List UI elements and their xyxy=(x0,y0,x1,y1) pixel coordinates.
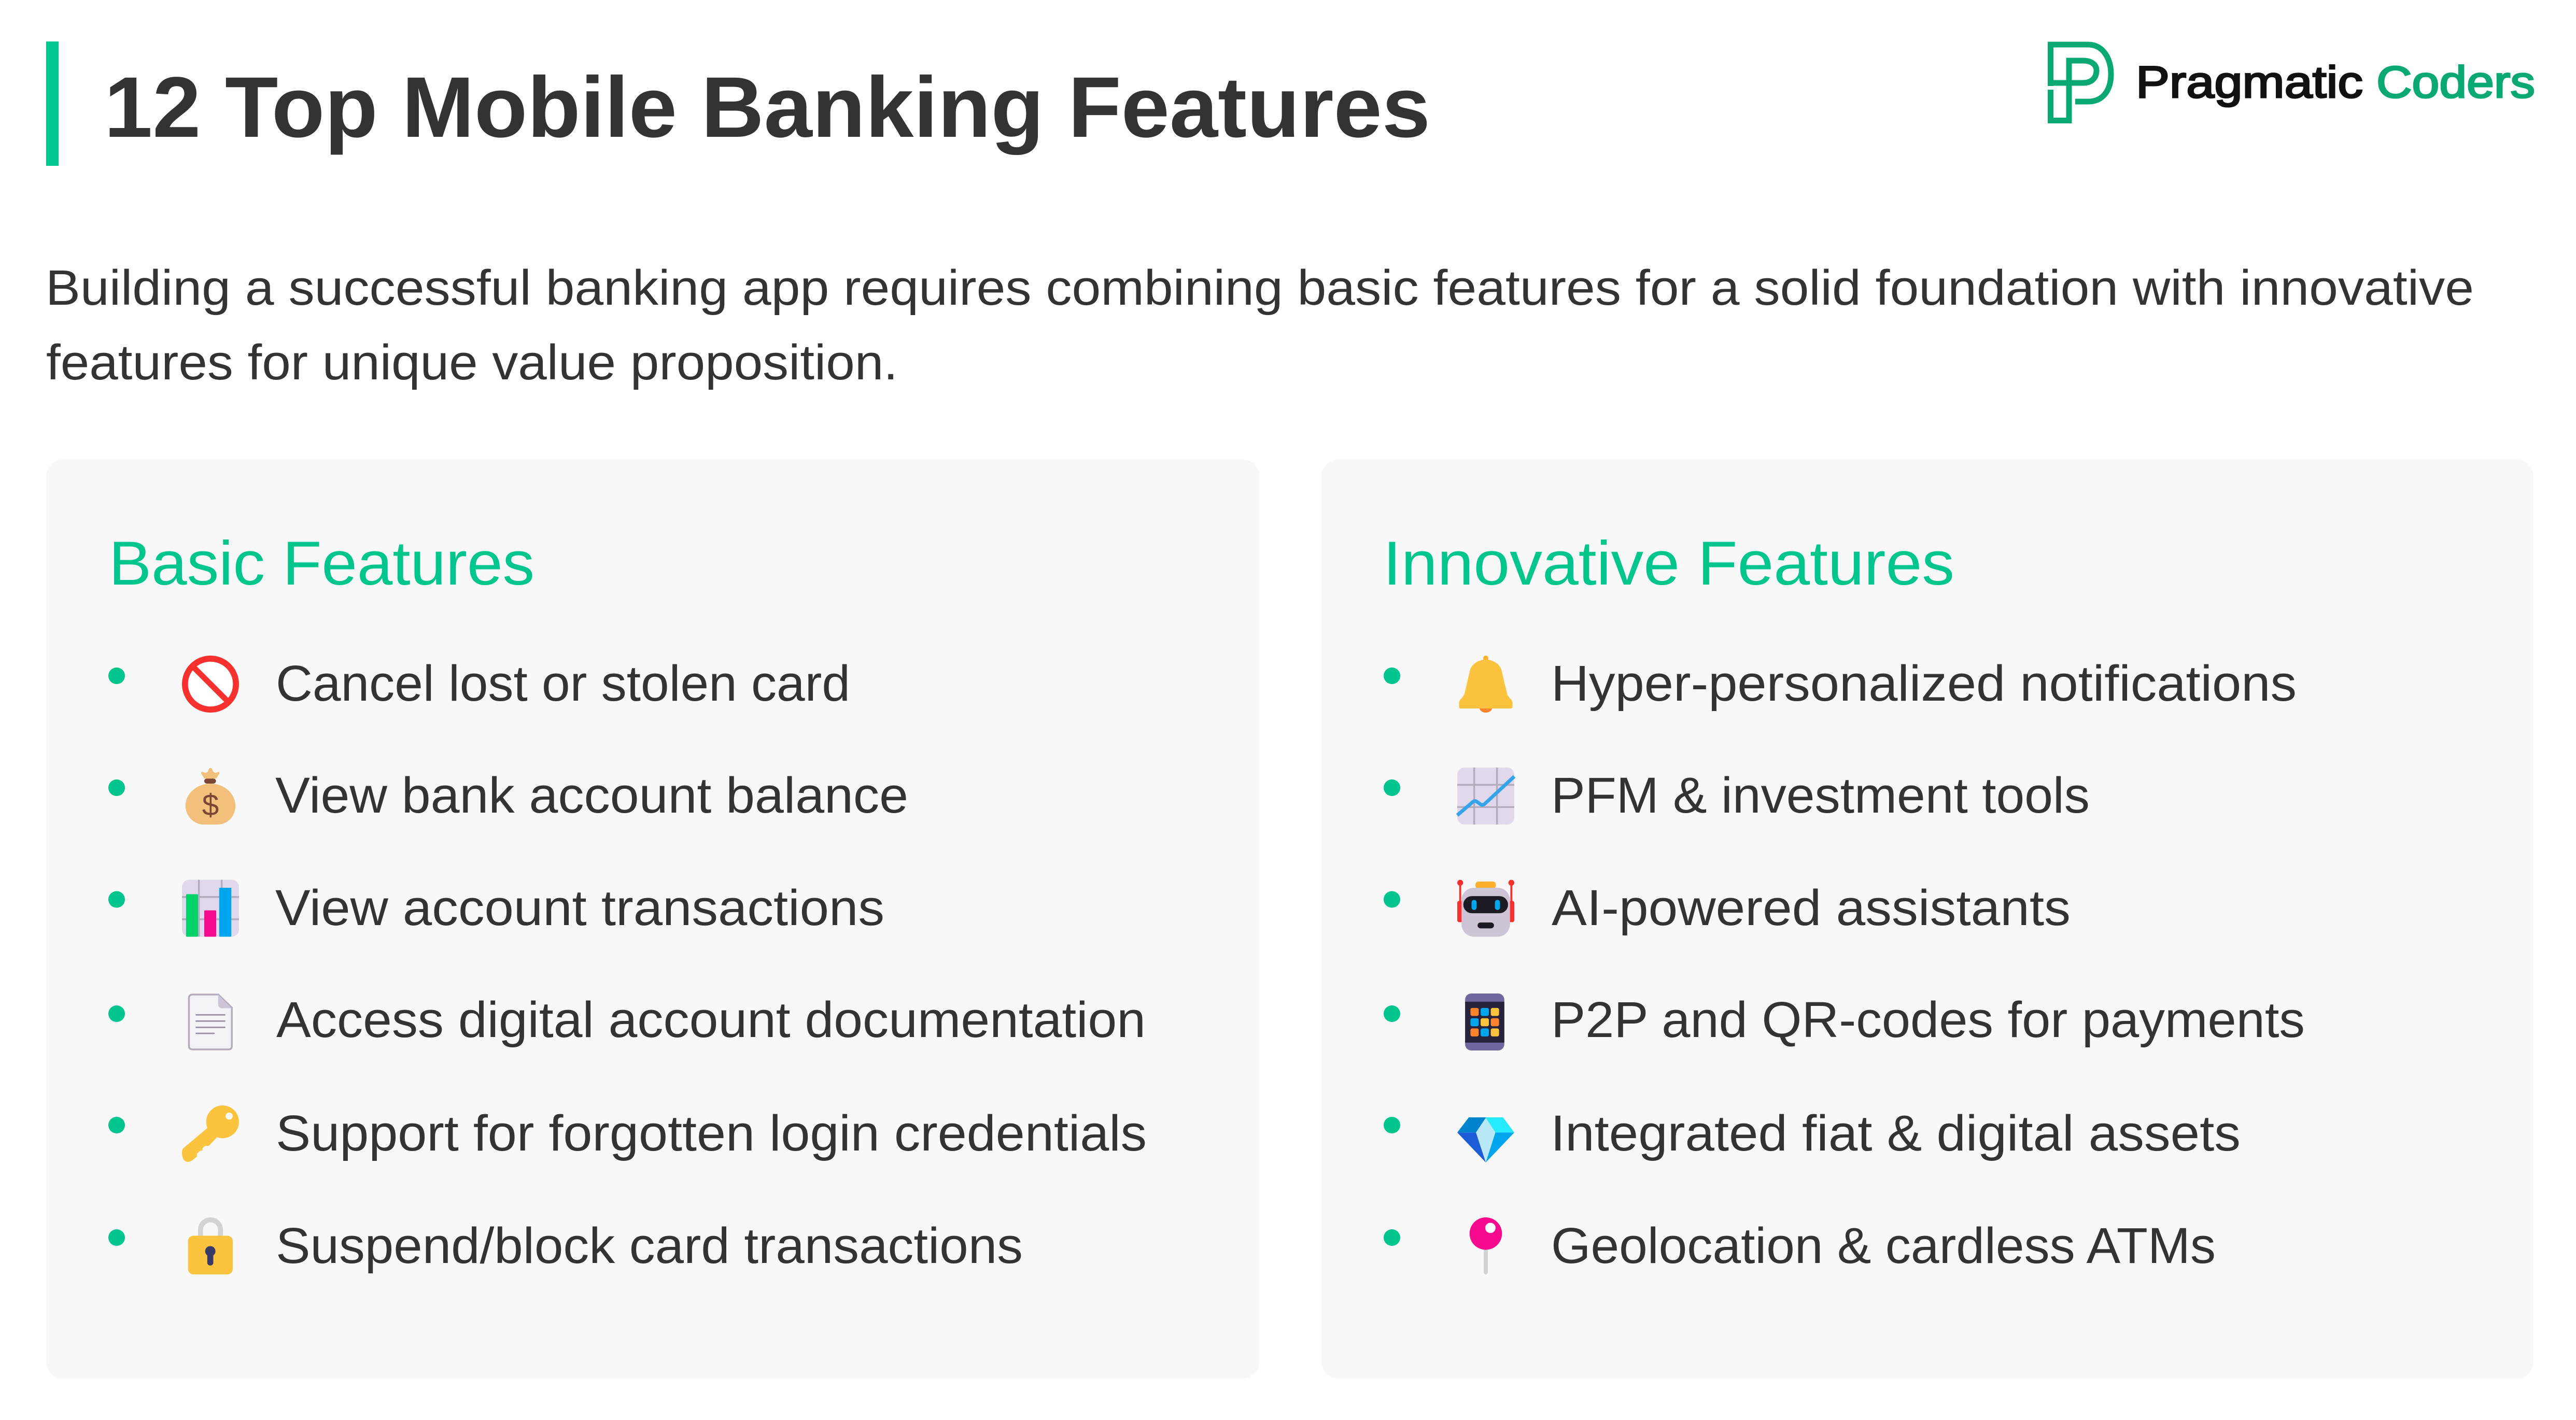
logo wordmark: Pragmatic xyxy=(2136,58,2363,107)
icon: no entry sign xyxy=(185,659,236,709)
icon: mobile phone xyxy=(1465,993,1504,1050)
panel: basic features xyxy=(46,460,1259,1379)
item: AI-powered assistants: AI-powered assistants xyxy=(1552,879,2071,936)
panel: innovative features xyxy=(1321,460,2533,1379)
heading: basic features: Basic Features xyxy=(109,529,534,598)
item: hyper-personalized notifications: Hyper-personalized notifications xyxy=(1551,655,2297,712)
item: cancel lost or stolen card: Cancel lost or stolen card xyxy=(276,655,850,712)
icon: money bag: $ xyxy=(202,788,219,822)
icon: money bag xyxy=(186,768,235,825)
icon: document xyxy=(189,995,232,1049)
icon: robot xyxy=(1457,880,1514,937)
item: integrated fiat and digital assets: Integrated fiat & digital assets xyxy=(1551,1105,2241,1161)
icon: pushpin xyxy=(1470,1217,1502,1274)
icon: bell xyxy=(1459,656,1513,713)
item: suspend/block card transactions: Suspend/block card transactions xyxy=(276,1217,1023,1274)
logo wordmark: Coders xyxy=(2376,58,2535,107)
item: geolocation and cardless ATMs: Geolocation & cardless ATMs xyxy=(1551,1217,2216,1274)
intro text: Building a successful banking app requires combining basic features for a solid foundation with innovative xyxy=(46,260,2474,316)
item: PFM and investment tools: PFM & investment tools xyxy=(1551,767,2090,823)
icon: line chart xyxy=(1457,768,1514,825)
icon: key xyxy=(182,1105,239,1162)
logo mark xyxy=(2048,45,2111,120)
item: P2P and QR-codes for payments: P2P and QR-codes for payments xyxy=(1551,991,2305,1048)
intro text xyxy=(46,260,2474,390)
title accent bar xyxy=(46,41,59,166)
heading: innovative features: Innovative Features xyxy=(1383,529,1954,598)
icon: lock xyxy=(188,1220,233,1274)
item: view account transactions: View account transactions xyxy=(275,879,884,936)
title block xyxy=(46,41,1430,166)
icon: gem xyxy=(1457,1117,1514,1162)
item: view bank account balance: View bank account balance xyxy=(275,767,908,823)
logo: Pragmatic Coders xyxy=(2048,45,2535,120)
panel background xyxy=(1321,460,2533,1379)
icon: bar chart xyxy=(182,880,239,937)
panel background xyxy=(46,460,1259,1379)
title: 12 Top Mobile Banking Features xyxy=(104,60,1430,155)
item: access digital account documentation: Access digital account documentation xyxy=(276,991,1146,1048)
intro text: features for unique value proposition. xyxy=(46,335,898,390)
item: support for forgotten login credentials: Support for forgotten login credentials xyxy=(276,1105,1147,1161)
